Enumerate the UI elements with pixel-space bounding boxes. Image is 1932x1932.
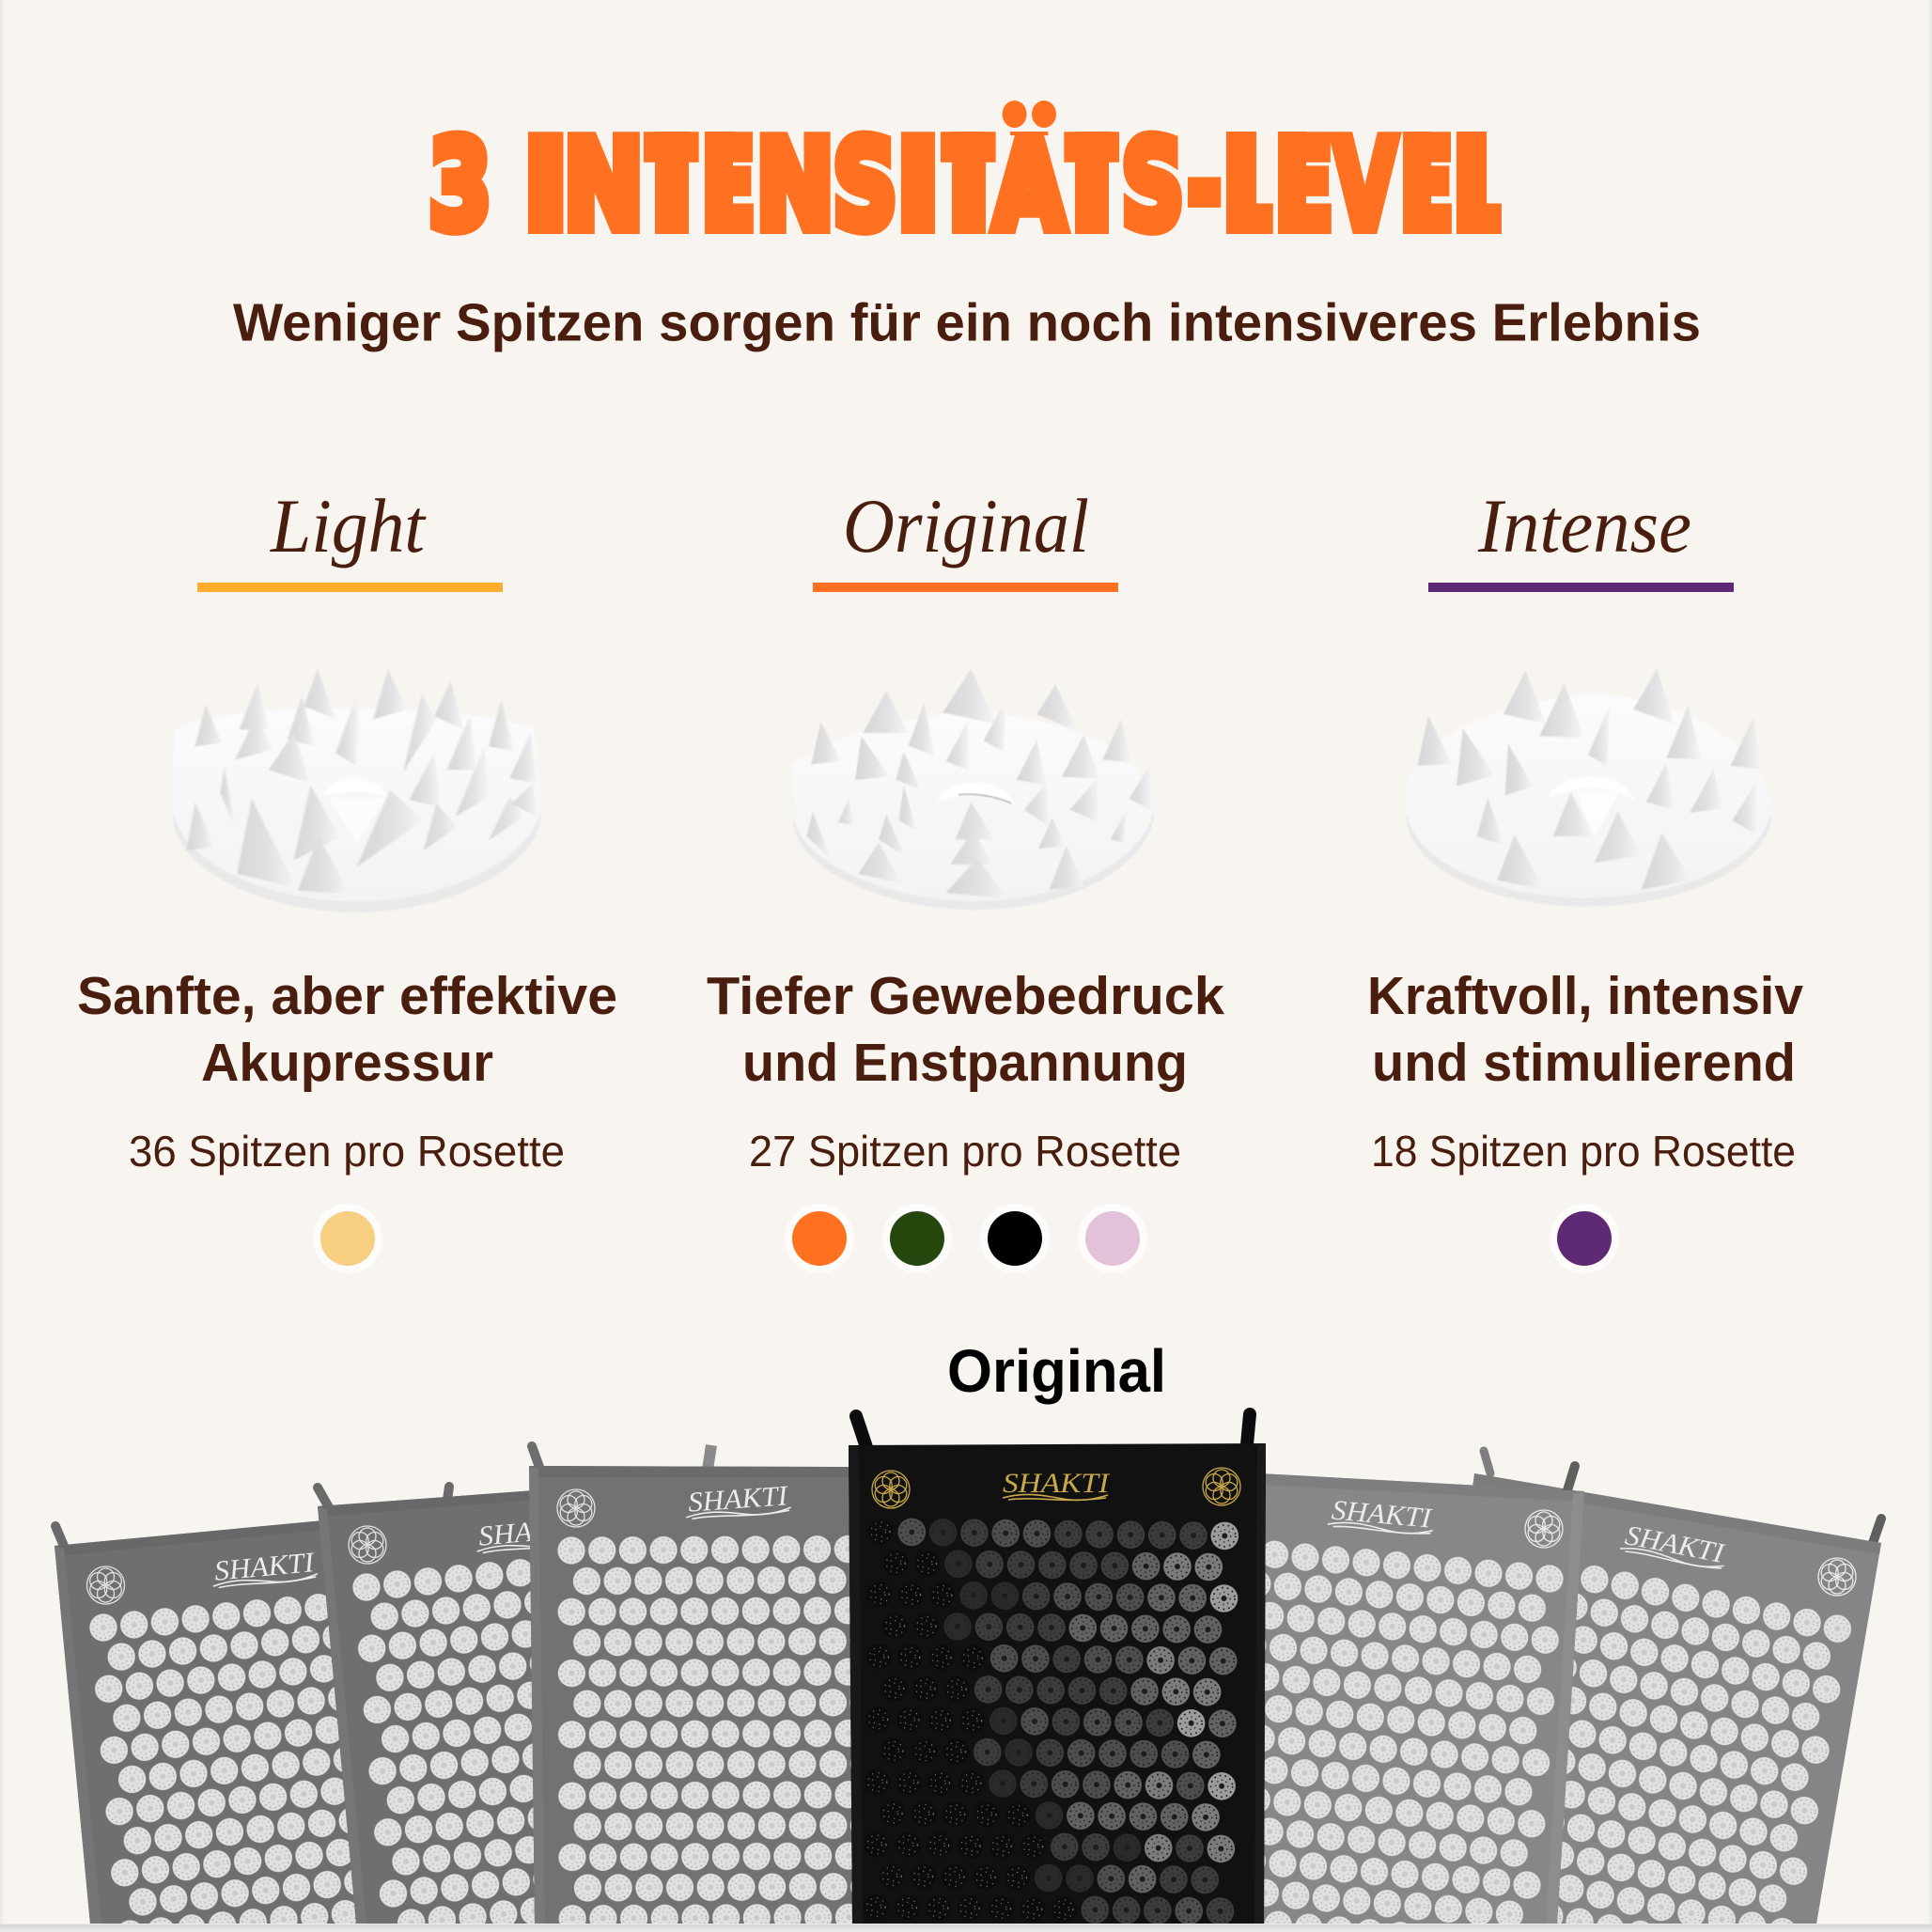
heading: Original: und Enstpannung [742, 1033, 1188, 1093]
title: N [756, 114, 834, 257]
mat: grey, second from right [1171, 1466, 1584, 1924]
underline: Intense [1428, 583, 1734, 592]
heading: Intense: Kraftvoll, intensiv [1367, 966, 1803, 1026]
brand: SHAKTI: SHAKTI [1331, 1494, 1434, 1535]
brand: SHAKTI: SHAKTI [477, 1512, 581, 1552]
heading: Original [707, 966, 1224, 1093]
brand: SHAKTI: SHAKTI [1623, 1519, 1728, 1569]
panel: Light [77, 483, 617, 1273]
title: E [1274, 114, 1333, 257]
right page edge shade [1929, 0, 1932, 1932]
colour swatch: purple [1550, 1204, 1619, 1273]
mat: grey, second from left [318, 1487, 752, 1924]
title: E [1400, 114, 1453, 257]
title: T [1067, 114, 1115, 257]
heading: Intense [1367, 966, 1803, 1093]
heading: Intense: und stimulierend [1372, 1033, 1796, 1093]
heading: Original: Tiefer Gewebedruck [707, 966, 1224, 1026]
level name: Light: Light [270, 483, 427, 569]
brand: SHAKTI: SHAKTI [687, 1480, 790, 1519]
title: E [702, 114, 756, 257]
title: L [1454, 114, 1500, 257]
title: Ä [994, 114, 1065, 257]
title [428, 94, 1500, 257]
mat: black Original, centre [849, 1414, 1266, 1925]
colour swatch: yellow [313, 1204, 382, 1273]
heading: Light: Akupressur [201, 1033, 493, 1093]
title: S [1122, 114, 1184, 257]
title: T [944, 114, 992, 257]
title: V [1333, 114, 1396, 257]
level name: Intense: Intense [1477, 483, 1691, 569]
icon: Intense rosette with 18 spikes [1407, 669, 1771, 907]
title: L [1223, 114, 1271, 257]
colour swatches: orange, green, black, pink [785, 1204, 1147, 1273]
icon: gold logo left [872, 1471, 910, 1508]
black mat rosettes [864, 1518, 1239, 1925]
spike count: Light: 36 Spitzen pro Rosette [129, 1127, 565, 1176]
mat: grey, far left [55, 1520, 486, 1924]
heading: Light [77, 966, 617, 1093]
bottom page edge shade [0, 1924, 1932, 1932]
icon: Light rosette with 36 spikes [173, 669, 541, 912]
brand: SHAKTI gold: SHAKTI [1003, 1468, 1111, 1499]
spike count: Original: 27 Spitzen pro Rosette [749, 1127, 1181, 1176]
mat: grey, far right [1410, 1451, 1881, 1924]
title: I [523, 114, 568, 257]
icon: Original rosette with 27 spikes [792, 669, 1154, 910]
heading: Light: Sanfte, aber effektive [77, 966, 617, 1026]
panel: Intense [1367, 483, 1803, 1273]
title: S [833, 114, 897, 257]
spike count: Intense: 18 Spitzen pro Rosette [1371, 1127, 1796, 1176]
underline: Light [197, 583, 503, 592]
title: - [1188, 114, 1221, 257]
title: N [564, 114, 644, 257]
title: I [896, 114, 940, 257]
panel: Original [707, 483, 1224, 1273]
left page edge shade [0, 0, 3, 1932]
icon: gold logo right [1203, 1468, 1240, 1505]
mat: grey, third from left [529, 1445, 926, 1924]
label: Original mat: Original [947, 1337, 1166, 1405]
underline: Original [813, 583, 1118, 592]
title: T [647, 114, 695, 257]
subtitle: Weniger Spitzen sorgen für ein noch intensiveres Erlebnis [233, 293, 1701, 353]
title: 3 [428, 114, 491, 257]
product row: acupressure mats [55, 1414, 1881, 1925]
brand: SHAKTI: SHAKTI [213, 1547, 317, 1587]
level name: Original: Original [843, 483, 1089, 569]
